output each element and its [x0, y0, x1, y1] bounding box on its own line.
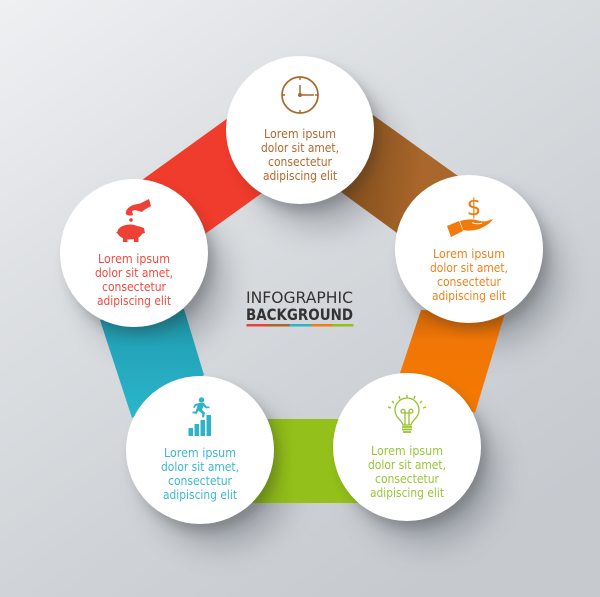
panel: right circle, orange: [395, 175, 543, 323]
icon: clock: [282, 77, 318, 113]
text: teal: consectetur: [168, 474, 232, 488]
panel: lower left circle, teal: [126, 376, 274, 524]
text: green: adipiscing elit: [370, 486, 444, 500]
band: brown: [341, 115, 458, 233]
text: orange: dolor sit amet,: [430, 261, 508, 275]
text: teal: Lorem ipsum: [164, 446, 236, 460]
band: teal: [100, 309, 204, 418]
text: teal: adipiscing elit: [163, 488, 237, 502]
text: red: Lorem ipsum: [98, 252, 170, 266]
text: green: Lorem ipsum: [371, 444, 443, 458]
text: teal: dolor sit amet,: [161, 460, 239, 474]
band: orange: [400, 310, 505, 413]
icon: light bulb: [388, 395, 426, 432]
title colour bar: [246, 324, 354, 326]
title: BACKGROUND: [246, 305, 353, 324]
text: red: adipiscing elit: [97, 294, 171, 308]
title: [246, 288, 354, 326]
circle shadows over bands: [67, 65, 548, 531]
text: green: consectetur: [375, 472, 439, 486]
icon: runner on bars: [188, 397, 211, 436]
text: orange: Lorem ipsum: [433, 247, 505, 261]
text: brown: dolor sit amet,: [261, 141, 339, 155]
icon: hand with dollar: $: [467, 195, 481, 221]
icon: piggy bank with hand: [116, 199, 151, 242]
band: red: [142, 118, 262, 234]
panel: left circle, red: [60, 179, 208, 327]
panel: top circle, brown: [226, 56, 374, 204]
text: green: dolor sit amet,: [368, 458, 446, 472]
text: red: consectetur: [102, 280, 166, 294]
shadows: [82, 84, 561, 548]
text: brown: Lorem ipsum: [264, 127, 336, 141]
text: brown: consectetur: [268, 155, 332, 169]
text: brown: adipiscing elit: [263, 169, 337, 183]
text: orange: consectetur: [437, 275, 501, 289]
text: red: dolor sit amet,: [95, 266, 173, 280]
text: orange: adipiscing elit: [432, 289, 506, 303]
title: INFOGRAPHIC: [246, 288, 353, 307]
band: green: [250, 419, 362, 503]
panel: lower right circle, green: [333, 373, 481, 521]
icon: hand with dollar: [447, 195, 493, 237]
